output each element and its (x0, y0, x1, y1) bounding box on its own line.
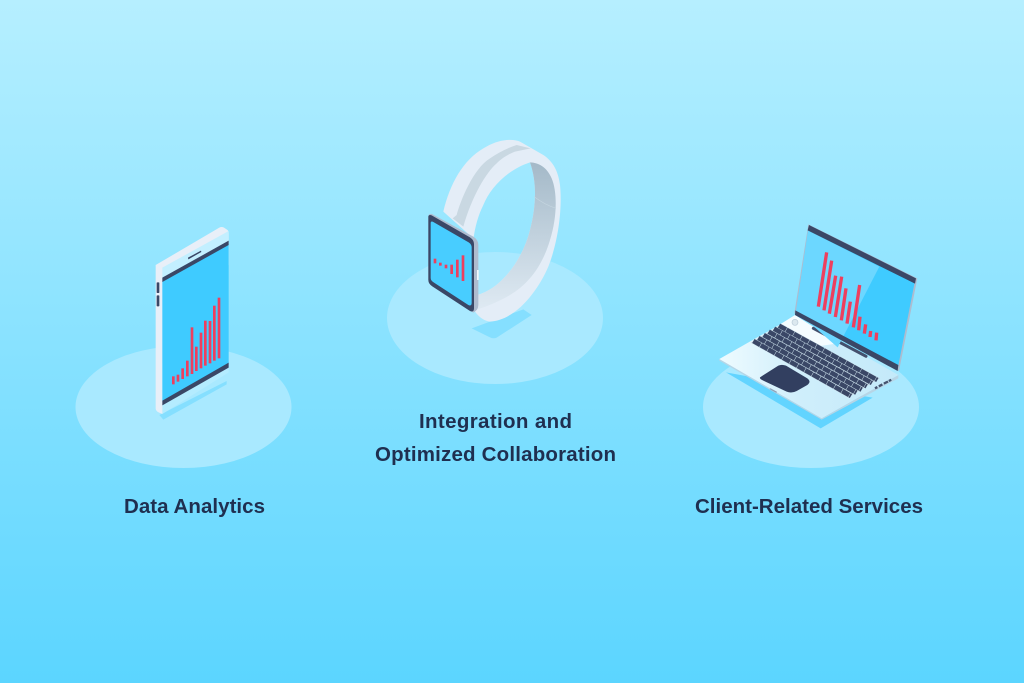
icon: laptop with bar chart (719, 224, 917, 428)
label: integration and optimized collaboration: Integration and (419, 410, 572, 433)
platform: phone (76, 346, 292, 468)
keyboard (751, 324, 880, 398)
label: integration and optimized collaboration (375, 410, 616, 466)
trackpad (760, 365, 809, 393)
panel: integration and optimized collaboration (375, 140, 616, 466)
label: client-related services: Client-Related Services (695, 495, 923, 518)
panel: client-related services (695, 224, 923, 518)
icon: smartphone with bar chart (156, 227, 229, 420)
screen (794, 224, 917, 371)
platform: laptop (703, 346, 919, 468)
label: data analytics: Data Analytics (124, 495, 265, 518)
icon: smartwatch with bar chart (428, 140, 561, 338)
label: integration and optimized collaboration: Optimized Collaboration (375, 443, 616, 466)
platform: watch (387, 252, 603, 384)
panel: data analytics (76, 227, 292, 518)
